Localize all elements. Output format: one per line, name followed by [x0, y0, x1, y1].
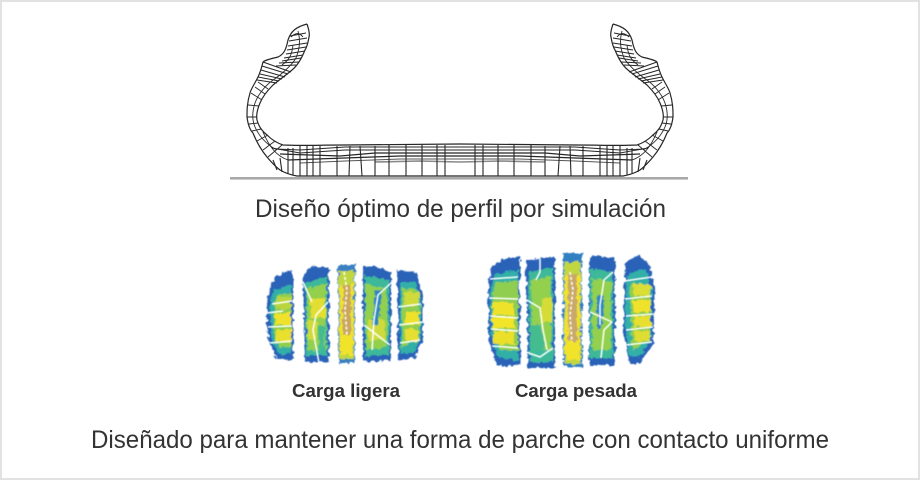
caption: contact patch: Diseñado para mantener una forma de parche con contacto uniforme: [91, 426, 829, 454]
tread grooves: [267, 272, 423, 363]
tire profile mesh: [230, 24, 688, 180]
label: light load: Carga ligera: [292, 381, 401, 401]
caption: profile: Diseño óptimo de perfil por simulación: [255, 195, 666, 223]
tread grooves: [489, 258, 654, 358]
footprint: light load: [267, 265, 423, 363]
footprint: heavy load: [488, 253, 655, 368]
right half of profile: [460, 24, 673, 176]
left half of profile: [247, 24, 460, 176]
label: heavy load: Carga pesada: [515, 381, 638, 401]
ground line: [230, 177, 688, 180]
